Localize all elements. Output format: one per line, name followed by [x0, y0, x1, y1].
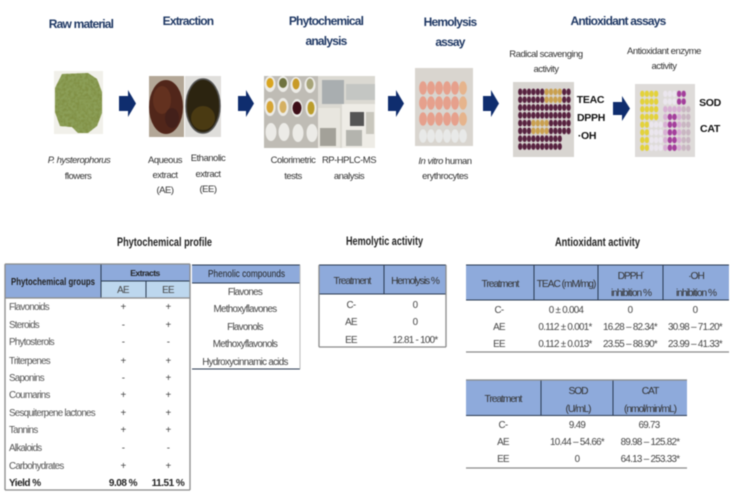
table: radical scavenging results: TEAC (mM/mg): [537, 279, 596, 290]
table: phytochemical groups: -: [122, 443, 125, 454]
table: radical scavenging results: 0: [628, 305, 634, 316]
table: radical scavenging results: inhibition %: [611, 288, 652, 299]
table: radical scavenging results: inhibition %: [676, 288, 717, 299]
caption: human erythrocytes: [418, 156, 472, 182]
table: phytochemical groups: +: [165, 425, 171, 436]
table: phenolic compounds: Flavones: [228, 287, 263, 298]
table: radical scavenging results: 16.28 – 82.34*: [603, 322, 658, 333]
photo: hemolysis plate: [415, 68, 473, 146]
caption: colorimetric tests: tests: [284, 171, 303, 182]
photo: aqueous extract: [149, 76, 184, 137]
table: phytochemical groups: EE: [162, 285, 175, 296]
table: enzyme results: (nmol/min/mL): [624, 404, 677, 415]
table: radical scavenging results: ·OH: [688, 271, 704, 282]
table: enzyme results: [466, 380, 687, 468]
caption: ethanolic extract: Ethanolic: [191, 153, 226, 164]
table: phytochemical groups: Flavonoids: [9, 302, 50, 313]
table: hemolysis: 0: [413, 317, 419, 328]
caption: RP-HPLC-MS analysis: [322, 155, 376, 182]
heading: hemolysis assay: [424, 15, 478, 49]
table: phytochemical groups: +: [165, 302, 171, 313]
table: phytochemical groups: +: [120, 461, 126, 472]
photo: radical scavenging plate: [513, 82, 574, 157]
table: hemolysis: C-: [347, 300, 356, 311]
table: phytochemical groups: Phytosterols: [9, 337, 55, 348]
table: radical scavenging results: 23.55 – 88.90*: [603, 339, 658, 350]
heading: phytochemical profile: Phytochemical profile: [117, 235, 212, 249]
photo: colorimetric tests: [264, 76, 318, 148]
table: enzyme results: C-: [499, 420, 508, 431]
table: enzyme results: SOD: [568, 386, 588, 397]
table: enzyme results: 10.44 – 54.66*: [550, 437, 605, 448]
table: enzyme results: AE: [497, 437, 510, 448]
label: enzyme assays: CAT: [700, 123, 721, 135]
table: phytochemical groups: -: [122, 373, 125, 384]
heading: extraction: Extraction: [163, 14, 214, 28]
table: enzyme results: 69.73: [638, 420, 661, 431]
table: phytochemical groups: +: [165, 320, 171, 331]
label: radical assays: TEAC: [577, 94, 605, 106]
table: enzyme results: (U/mL): [565, 404, 591, 415]
photo: ethanolic extract: [185, 76, 221, 137]
label: radical assays: [577, 94, 605, 142]
table: phytochemical groups: Triterpenes: [9, 356, 51, 367]
caption: RP-HPLC-MS analysis: RP-HPLC-MS: [322, 155, 376, 166]
heading: hemolysis assay: assay: [435, 35, 466, 49]
table: phytochemical groups: +: [120, 356, 126, 367]
caption: aqueous extract: (AE): [156, 185, 174, 196]
table: phytochemical groups: Steroids: [9, 320, 40, 331]
caption: human erythrocytes: erythrocytes: [422, 171, 469, 182]
table: phytochemical groups: +: [120, 302, 126, 313]
table: phytochemical groups: +: [165, 356, 171, 367]
table: phytochemical groups: Saponins: [9, 373, 45, 384]
table: radical scavenging results: AE: [493, 322, 506, 333]
table: radical scavenging results: C-: [495, 305, 504, 316]
table: hemolysis: 12.81 - 100*: [393, 335, 438, 346]
table: radical scavenging results: 0: [693, 305, 699, 316]
caption: aqueous extract: [148, 155, 183, 196]
caption: colorimetric tests: [271, 155, 316, 182]
table: phenolic compounds: Methoxyflavonols: [213, 339, 278, 350]
table: phytochemical groups: -: [122, 320, 125, 331]
table: phytochemical groups: Coumarins: [9, 390, 50, 401]
photo: raw flowers: [54, 71, 103, 134]
caption: human erythrocytes: In vitro human: [418, 156, 472, 167]
table: phytochemical groups: -: [167, 337, 170, 348]
arrow 1: [119, 90, 136, 117]
table: phytochemical groups: +: [120, 390, 126, 401]
heading: raw material: Raw material: [49, 17, 114, 31]
table: phytochemical groups: Alkaloids: [9, 443, 42, 454]
table: hemolysis: AE: [345, 317, 358, 328]
caption: ethanolic extract: extract: [195, 169, 221, 180]
caption: radical scavenging activity: activity: [533, 64, 559, 75]
heading: phytochemical analysis: analysis: [306, 34, 348, 48]
table: hemolysis: EE: [345, 335, 358, 346]
table: phenolic compounds: Methoxyflavones: [213, 304, 277, 315]
table: phenolic compounds: Hydroxycinnamic acids: [202, 357, 289, 368]
table: radical scavenging results: [466, 265, 729, 352]
table: phytochemical groups: Phytochemical groups: [11, 276, 95, 288]
table: phytochemical groups: AE: [117, 285, 130, 296]
table: phytochemical groups: Tannins: [9, 425, 38, 436]
table: enzyme results: 9.49: [569, 420, 585, 431]
table: phenolic compounds: Phenolic compounds: [208, 268, 285, 280]
table: phytochemical groups: +: [165, 390, 171, 401]
heading: hemolysis assay: Hemolysis: [424, 15, 478, 29]
arrow 5: [613, 96, 630, 121]
table: enzyme results: 0: [575, 454, 581, 465]
table: phytochemical groups: +: [120, 425, 126, 436]
table: hemolysis: 0: [413, 300, 419, 311]
table: phytochemical groups: 9.08 %: [109, 478, 138, 489]
table: radical scavenging results: 0.112 ± 0.001*: [538, 322, 592, 333]
heading: antioxidant assays: Antioxidant assays: [571, 14, 667, 28]
label: radical assays: ·OH: [578, 130, 596, 142]
table: radical scavenging results: Treatment: [481, 279, 520, 290]
caption: radical scavenging activity: [509, 49, 583, 75]
caption: ethanolic extract: [191, 153, 226, 195]
caption: antioxidant enzyme activity: Antioxidant enzyme: [627, 46, 701, 57]
arrow 3: [388, 90, 404, 117]
table: phytochemical groups: Sesquiterpene lactones: [9, 408, 96, 419]
table: phytochemical groups: +: [165, 373, 171, 384]
heading: hemolytic activity: Hemolytic activity: [346, 234, 423, 248]
caption: flowers: flowers: [65, 171, 92, 182]
table: radical scavenging results: 30.98 – 71.20*: [668, 322, 723, 333]
photo: HPLC-MS instrument: [318, 76, 375, 148]
table: phytochemical groups: 11.51 %: [152, 478, 185, 489]
heading: phytochemical analysis: [289, 14, 364, 48]
table: enzyme results: CAT: [642, 386, 659, 397]
photo: antioxidant enzyme plate: [635, 84, 695, 157]
table: enzyme results: EE: [497, 454, 510, 465]
table: phytochemical groups: Yield %: [9, 478, 41, 489]
table: phytochemical groups: Carbohydrates: [9, 461, 64, 472]
heading: antioxidant activity: Antioxidant activity: [555, 235, 640, 249]
table: hemolysis: Treatment: [333, 276, 372, 287]
caption: colorimetric tests: Colorimetric: [271, 155, 316, 166]
table: phytochemical groups: +: [165, 408, 171, 419]
caption: flowers: P. hysterophorus: [48, 155, 111, 166]
table: radical scavenging results: DPPH˙: [618, 271, 644, 282]
table: radical scavenging results: 0 ± 0.004: [549, 305, 584, 316]
table: hemolysis: [319, 265, 446, 347]
caption: flowers: [48, 155, 111, 182]
label: enzyme assays: SOD: [699, 97, 722, 109]
table: radical scavenging results: EE: [493, 339, 506, 350]
table: phytochemical groups: +: [120, 408, 126, 419]
table: hemolysis: Hemolysis %: [391, 276, 440, 287]
heading: phytochemical analysis: Phytochemical: [289, 14, 364, 28]
table: phytochemical groups: -: [167, 443, 170, 454]
table: phytochemical groups: +: [165, 461, 171, 472]
table: phytochemical groups: Extracts: [130, 268, 161, 278]
table: radical scavenging results: 23.99 – 41.33*: [668, 339, 723, 350]
table: enzyme results: Treatment: [484, 394, 523, 405]
caption: antioxidant enzyme activity: activity: [651, 61, 677, 72]
caption: antioxidant enzyme activity: [627, 46, 701, 72]
arrow 4: [483, 90, 499, 117]
caption: radical scavenging activity: Radical scavenging: [509, 49, 583, 60]
arrow 2: [238, 90, 254, 117]
caption: aqueous extract: extract: [152, 170, 178, 181]
label: enzyme assays: [699, 97, 722, 135]
label: radical assays: DPPH: [577, 112, 605, 124]
table: phytochemical groups: -: [122, 337, 125, 348]
caption: aqueous extract: Aqueous: [148, 155, 183, 166]
table: radical scavenging results: 0.112 ± 0.013*: [538, 339, 592, 350]
table: phenolic compounds: [192, 265, 300, 369]
table: phenolic compounds: Flavonols: [227, 322, 264, 333]
caption: ethanolic extract: (EE): [200, 184, 217, 195]
table: phytochemical groups: [5, 264, 190, 490]
caption: RP-HPLC-MS analysis: analysis: [334, 171, 365, 182]
table: enzyme results: 64.13 – 253.33*: [621, 454, 680, 465]
table: enzyme results: 89.98 – 125.82*: [621, 437, 680, 448]
